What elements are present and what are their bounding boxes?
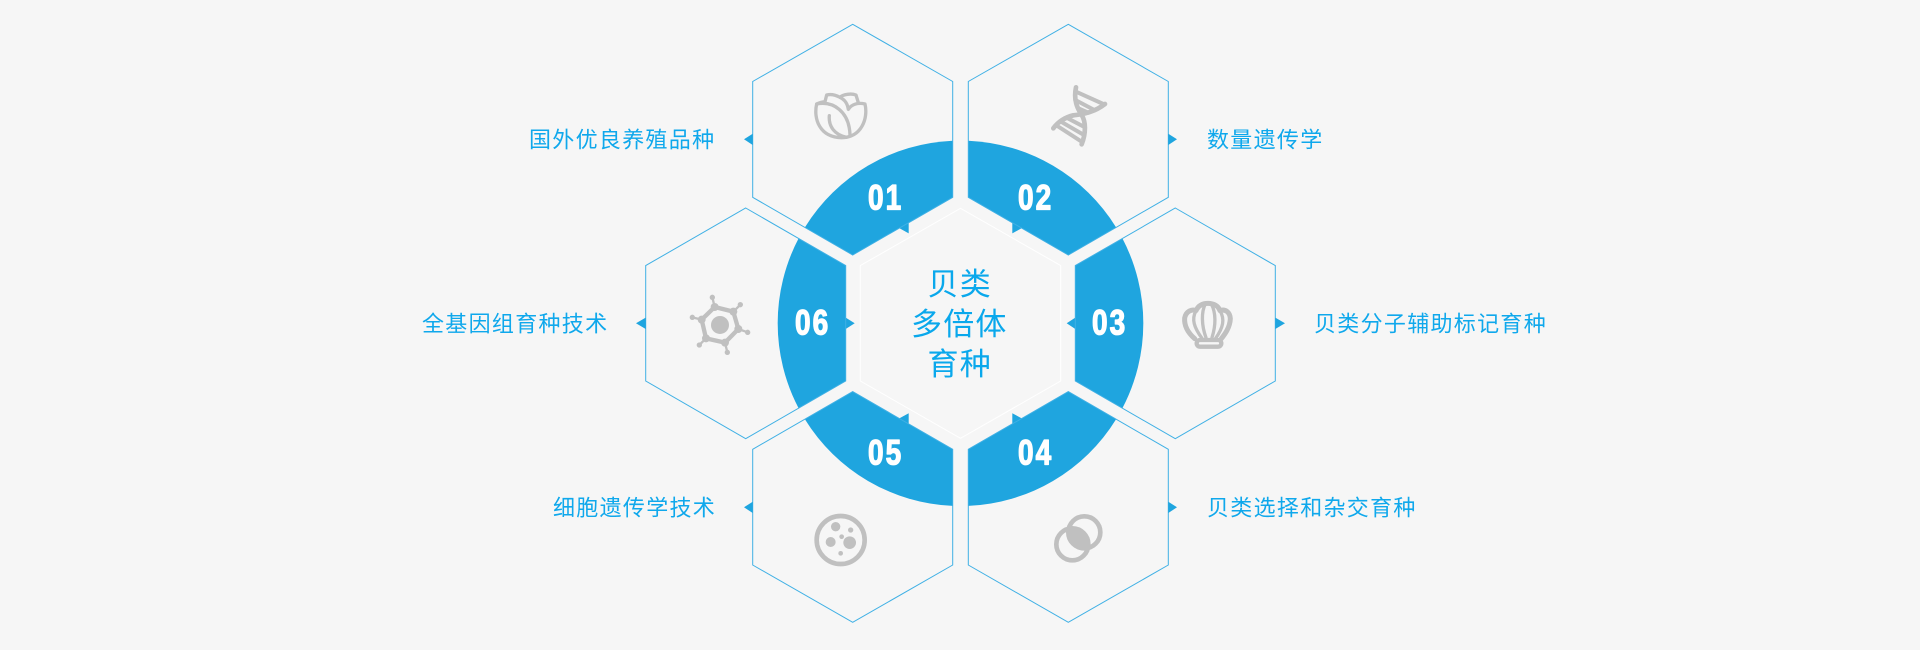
label 03: 贝类分子辅助标记育种 [1314, 312, 1547, 336]
hexagon 01 outline [753, 24, 953, 255]
arrow: hexagon 02 outer [1168, 134, 1177, 145]
label 01: 国外优良养殖品种 [529, 128, 715, 152]
arrow: hexagon 04 outer [1168, 502, 1177, 513]
arrow: hexagon 01 outer [744, 134, 753, 145]
number 02: 02 [1018, 177, 1053, 217]
label 02: 数量遗传学 [1207, 128, 1324, 152]
hexagon 04 outline [968, 392, 1168, 622]
label 06: 全基因组育种技术 [422, 312, 608, 336]
segment 06 blue sector [778, 238, 855, 408]
hexagon 05 outline [753, 392, 953, 622]
segment 05 blue sector [805, 392, 953, 506]
icon: flower [816, 94, 866, 138]
icon: shell [1185, 303, 1230, 347]
number 01: 01 [868, 177, 903, 217]
arrow: hexagon 05 outer [744, 502, 753, 513]
number 04: 04 [1018, 432, 1053, 472]
icon: cell [817, 516, 865, 564]
label 05: 细胞遗传学技术 [553, 496, 716, 520]
number 06: 06 [795, 302, 830, 342]
center title [911, 267, 1008, 382]
label 04: 贝类选择和杂交育种 [1207, 496, 1417, 520]
segment 04 blue sector [968, 392, 1116, 506]
segment 02 blue sector [968, 141, 1116, 255]
number 05: 05 [868, 432, 903, 472]
icon: overlapping circles [1056, 516, 1100, 560]
center title: 贝类 [928, 267, 992, 302]
number 03: 03 [1092, 302, 1127, 342]
hexagon 02 outline [968, 24, 1168, 255]
segment 01 blue sector [805, 141, 953, 255]
arrow: hexagon 06 outer [636, 318, 646, 329]
icon: DNA helix [1053, 87, 1105, 144]
hexagon 03 outline [1075, 208, 1275, 439]
segment 03 blue sector [1067, 238, 1143, 408]
center title: 育种 [928, 347, 992, 382]
icon: molecule [690, 295, 750, 355]
arrow: hexagon 03 outer [1275, 318, 1285, 329]
hexagon 06 outline [646, 208, 846, 439]
center title: 多倍体 [911, 307, 1008, 342]
center hexagon [860, 208, 1061, 438]
